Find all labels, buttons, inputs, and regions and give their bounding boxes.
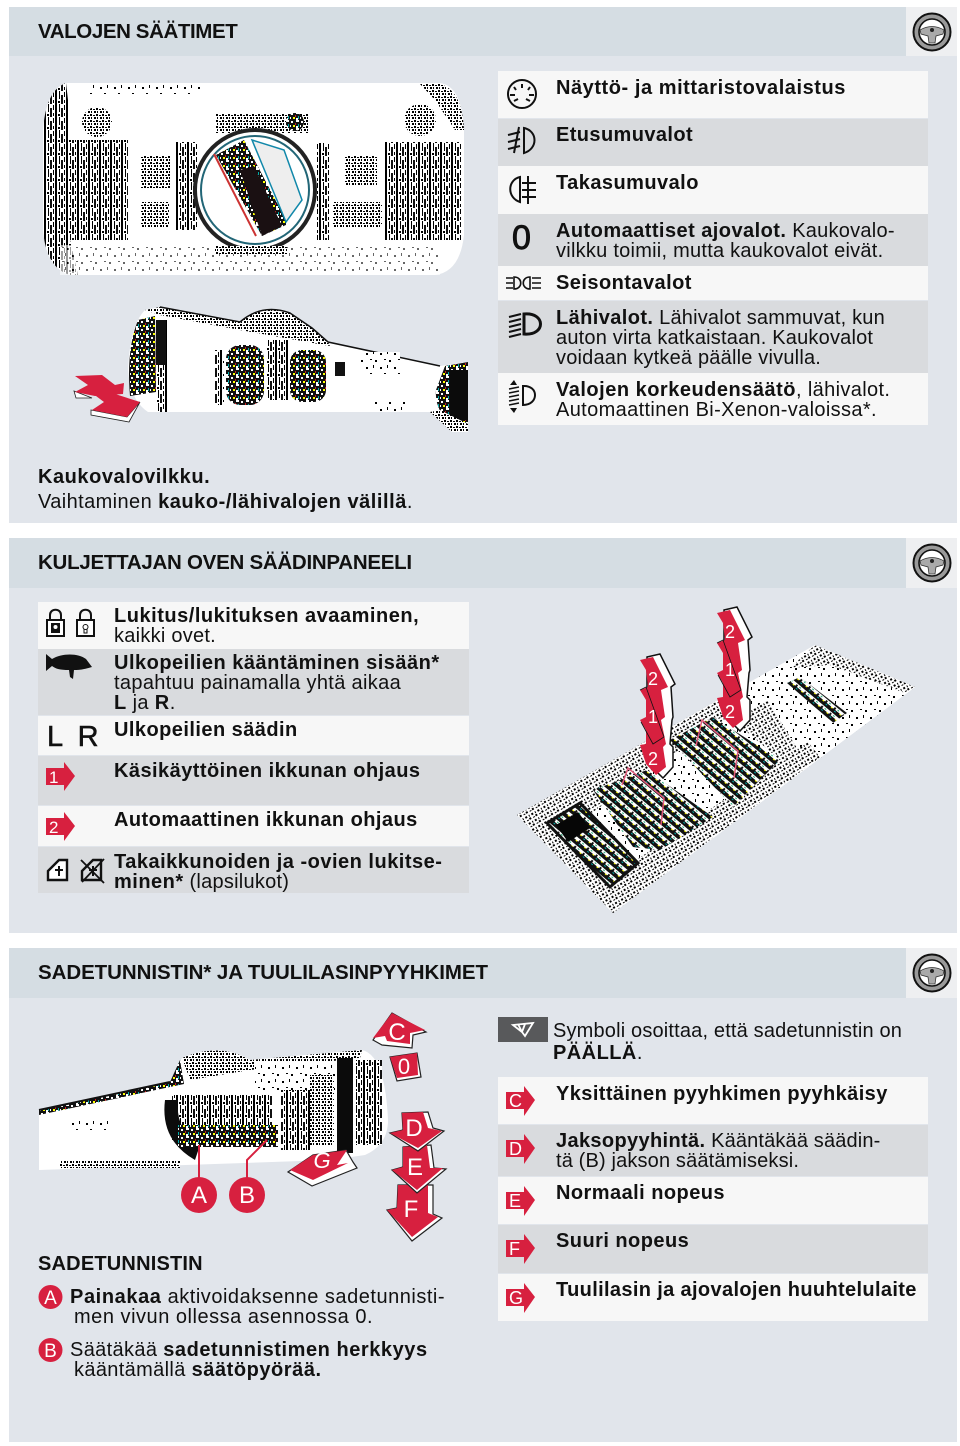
row F <box>498 1225 928 1273</box>
icon: steering wheel 2 <box>906 538 957 588</box>
label: Etusumuvalot <box>556 124 693 146</box>
illustration: wiper stalk <box>39 1050 388 1170</box>
text: kaukovalovilkku <box>38 466 413 513</box>
icon: arrow 2: 2 <box>49 818 58 837</box>
text A <box>70 1287 445 1327</box>
arrow label: D: D <box>405 1115 423 1142</box>
instruction A <box>38 1285 458 1329</box>
icon: dipped beam <box>508 312 542 338</box>
label: 1: 1 <box>648 707 658 727</box>
badge B: B <box>44 1341 57 1362</box>
label: Lähivalot. Lähivalot sammuvat, kun <box>556 307 885 329</box>
arrows: high-beam flash <box>74 375 140 422</box>
row E <box>498 1177 928 1224</box>
label: Takaikkunoiden ja -ovien lukitse- <box>114 851 442 873</box>
panel: kuljettajan oven säädinpaneeli <box>9 538 957 933</box>
symbol: rain sensor active <box>498 1017 548 1042</box>
text: symbol explanation <box>553 1020 902 1064</box>
label: 1: 1 <box>725 660 735 680</box>
label: tapahtuu painamalla yhtä aikaa <box>114 672 401 694</box>
icon: arrow G: G <box>509 1288 523 1308</box>
label: kaikki ovet. <box>114 625 216 647</box>
row: ulkopeilien kääntäminen <box>38 649 469 715</box>
label: 2: 2 <box>648 749 658 769</box>
arrow label: C: C <box>388 1019 406 1046</box>
label: Jaksopyyhintä. Kääntäkää säädin- <box>556 1130 880 1152</box>
heading: sadetunnistin ja tuulilasinpyyhkimet: SADETUNNISTIN* JA TUULILASINPYYHKIMET <box>38 961 488 984</box>
label: auton virta katkaistaan. Kaukovalot <box>556 327 873 349</box>
label: Ulkopeilien säädin <box>114 719 298 741</box>
row G <box>498 1274 928 1321</box>
marker label: B: B <box>239 1182 255 1209</box>
label: Automaattiset ajovalot. Kaukovalo- <box>556 220 895 242</box>
illustration: light switch panel <box>43 83 464 275</box>
instruction B <box>38 1338 458 1382</box>
row: ulkopeilien säädin <box>38 716 469 755</box>
label: Yksittäinen pyyhkimen pyyhkäisy <box>556 1083 888 1105</box>
icon: arrow F: F <box>509 1239 520 1259</box>
icon: L R: L R <box>47 721 99 753</box>
icon: position 0: 0 <box>512 219 531 257</box>
label: Normaali nopeus <box>556 1182 725 1204</box>
icon: arrow C <box>506 1086 535 1116</box>
icon: steering wheel 1 <box>906 7 957 56</box>
label: Valojen korkeudensäätö, lähivalot. <box>556 379 890 401</box>
row: näyttö- ja mittaristovalaistus <box>498 71 928 118</box>
label: Tuulilasin ja ajovalojen huuhtelulaite <box>556 1279 917 1301</box>
heading: valojen säätimet: VALOJEN SÄÄTIMET <box>38 20 237 43</box>
label: Käsikäyttöinen ikkunan ohjaus <box>114 760 420 782</box>
label <box>556 1130 880 1172</box>
row: lukitus <box>38 602 469 649</box>
icon: child locks <box>46 858 105 884</box>
illustration: light stalk <box>128 307 468 432</box>
icon: arrow F <box>506 1234 535 1264</box>
badge B <box>38 1338 63 1362</box>
row: etusumuvalot <box>498 119 928 166</box>
icon: arrow 1: 1 <box>49 768 58 787</box>
text A: Painakaa aktivoidaksenne sadetunnisti- <box>70 1286 445 1308</box>
label <box>114 605 419 647</box>
callout markers A and B <box>181 1140 267 1213</box>
subheading: sadetunnistin: SADETUNNISTIN <box>38 1253 203 1275</box>
arrows: wiper positions C 0 D E F G <box>288 1013 446 1241</box>
arrows: window control stack left <box>640 654 675 778</box>
header band: valojen säätimet <box>9 7 906 56</box>
badge A <box>38 1285 63 1309</box>
text: symbol explanation: PÄÄLLÄ. <box>553 1042 643 1064</box>
icon: arrow E <box>506 1186 535 1216</box>
header band: kuljettajan ovi <box>9 538 906 588</box>
row: valojen korkeudensäätö <box>498 373 928 425</box>
table: wiper functions <box>498 1077 928 1321</box>
icon: instrument lighting <box>507 79 537 109</box>
label <box>556 307 885 369</box>
label: tä (B) jakson säätämiseksi. <box>556 1150 799 1172</box>
label: L ja R. <box>114 692 176 714</box>
arrow label: G: G <box>313 1148 331 1173</box>
icon: beam height <box>508 380 536 413</box>
heading: kuljettajan oven säädinpaneeli: KULJETTAJAN OVEN SÄÄDINPANEELI <box>38 551 412 574</box>
text B: kääntämällä säätöpyörää. <box>74 1359 322 1381</box>
icon: arrow G <box>506 1283 535 1313</box>
icon: arrow E: E <box>509 1191 521 1211</box>
label <box>556 379 890 421</box>
text: kaukovalovilkku: Kaukovalovilkku. <box>38 466 210 488</box>
label <box>556 220 895 262</box>
panel: valojen säätimet <box>9 7 957 523</box>
badge A: A <box>44 1288 57 1309</box>
label: Ulkopeilien kääntäminen sisään* <box>114 652 440 674</box>
text: kaukovalovilkku: Vaihtaminen kauko-/lähivalojen välillä. <box>38 491 413 513</box>
header band: sadetunnistin <box>9 948 906 998</box>
text B: Säätäkää sadetunnistimen herkkyys <box>70 1339 428 1361</box>
row: takaikkunoiden lukitus <box>38 847 469 893</box>
icon: rear fog <box>509 176 536 204</box>
arrow label: 0: 0 <box>398 1054 410 1079</box>
label: Takasumuvalo <box>556 172 699 194</box>
label: Suuri nopeus <box>556 1230 689 1252</box>
icon: folded mirror <box>46 654 92 679</box>
row: automaattiset ajovalot <box>498 214 928 266</box>
illustration: door control panel <box>517 645 915 913</box>
row: automaattinen <box>38 806 469 846</box>
label <box>114 652 440 714</box>
label: Seisontavalot <box>556 272 692 294</box>
table: light functions <box>498 71 928 425</box>
icon: locks <box>46 608 95 637</box>
text B <box>70 1340 428 1380</box>
icon: arrow 2 <box>46 812 75 841</box>
label: Näyttö- ja mittaristovalaistus <box>556 77 846 99</box>
icon: front fog <box>508 126 536 154</box>
label: Lukitus/lukituksen avaaminen, <box>114 605 419 627</box>
icon: parking lights <box>506 276 541 290</box>
marker label: A: A <box>191 1182 207 1209</box>
label <box>114 851 442 893</box>
row: käsikäyttöinen <box>38 756 469 805</box>
text A: men vivun ollessa asennossa 0. <box>74 1306 373 1328</box>
label: 2: 2 <box>725 702 735 722</box>
icon: arrow D <box>506 1134 535 1164</box>
arrow label: F: F <box>404 1196 418 1223</box>
row: seisontavalot <box>498 266 928 300</box>
label: 2: 2 <box>648 669 658 689</box>
label: Automaattinen ikkunan ohjaus <box>114 809 418 831</box>
icon: arrow C: C <box>509 1091 522 1111</box>
icon: steering wheel 3 <box>906 948 957 998</box>
row: lähivalot <box>498 301 928 373</box>
text: symbol explanation: Symboli osoittaa, että sadetunnistin on <box>553 1020 902 1042</box>
icon: arrow D: D <box>509 1139 522 1159</box>
label: 2: 2 <box>725 622 735 642</box>
table: door panel functions <box>38 602 469 893</box>
row C <box>498 1077 928 1124</box>
label: vilkku toimii, mutta kaukovalot eivät. <box>556 240 883 262</box>
label: minen* (lapsilukot) <box>114 871 289 893</box>
row: takasumuvalo <box>498 166 928 214</box>
arrows: window control stack right <box>717 607 752 731</box>
arrow label: E: E <box>407 1154 423 1181</box>
panel: sadetunnistin ja tuulilasinpyyhkimet <box>9 948 957 1442</box>
label: Automaattinen Bi-Xenon-valoissa*. <box>556 399 877 421</box>
row D <box>498 1125 928 1176</box>
icon: arrow 1 <box>46 762 75 791</box>
label: voidaan kytkeä päälle vivulla. <box>556 347 821 369</box>
